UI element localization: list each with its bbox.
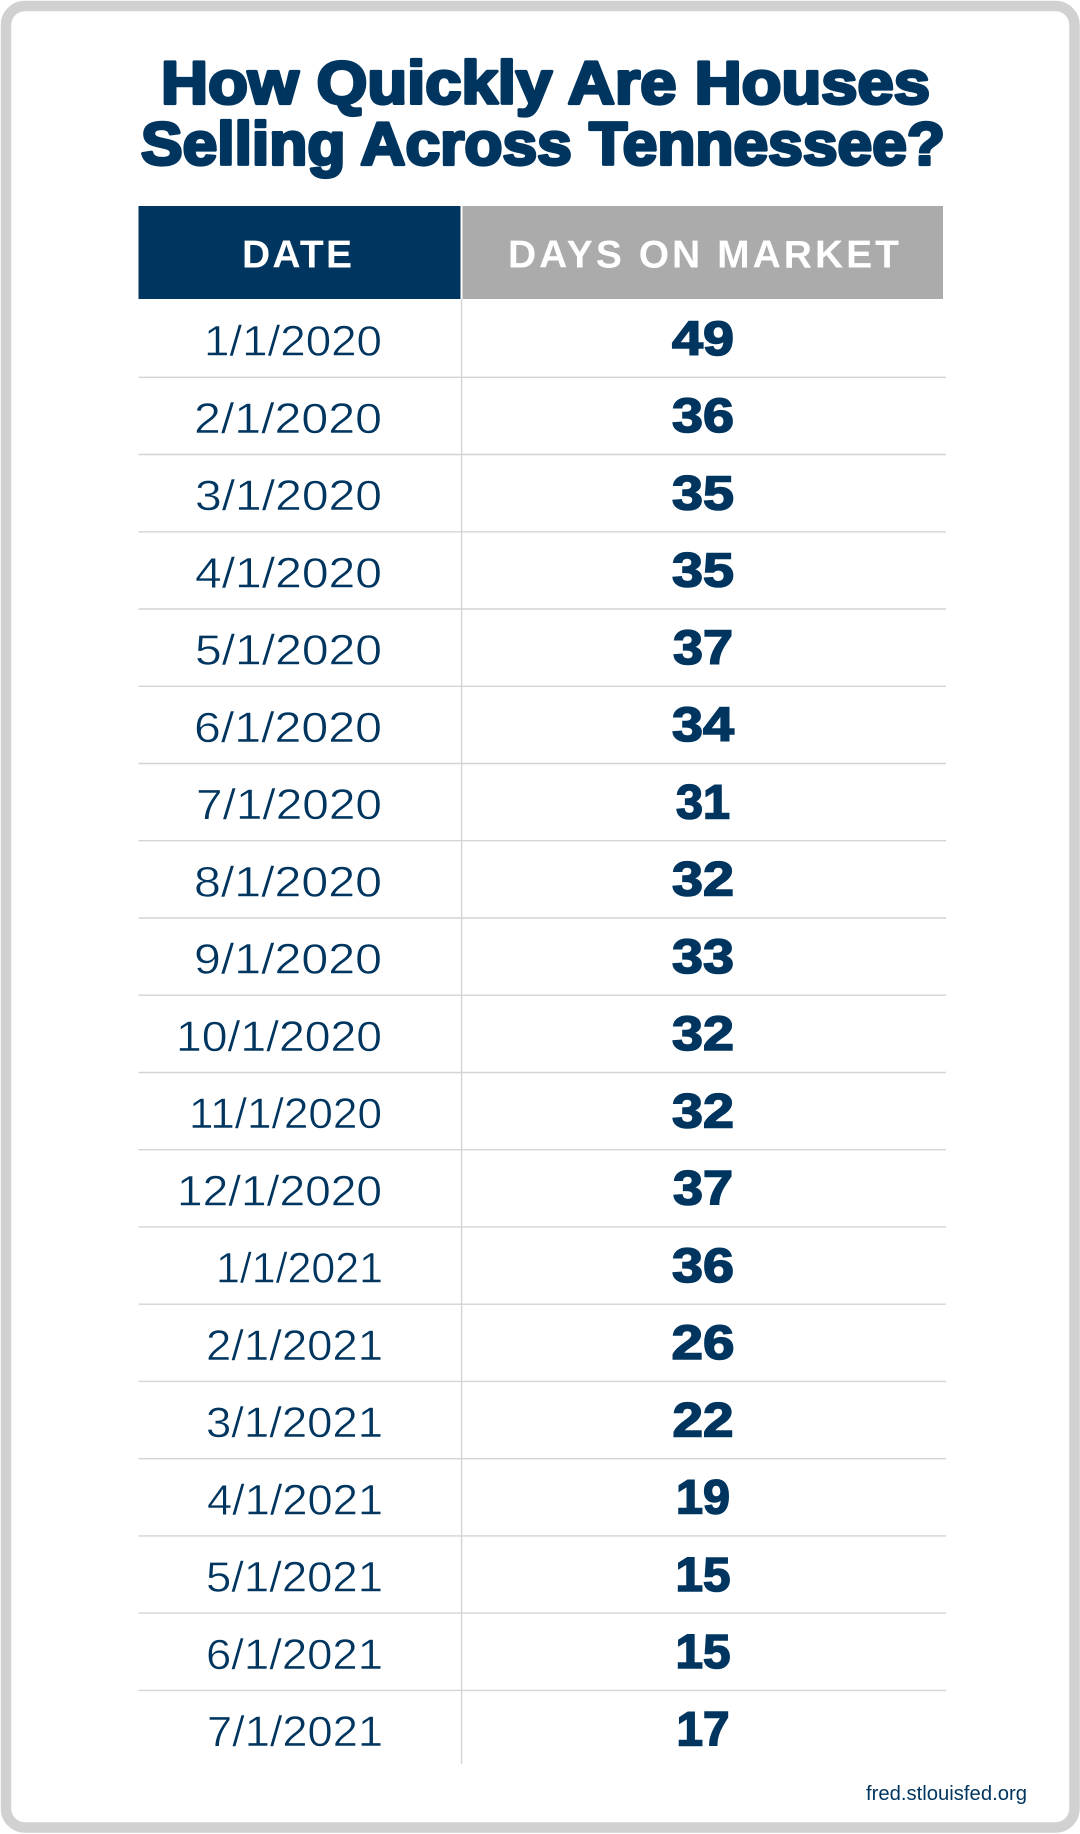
row 5/1/2020: [195, 622, 733, 675]
row 5/1/2020: 5/1/2020: [195, 627, 382, 675]
row 7/1/2020: 7/1/2020: [196, 781, 382, 829]
row 7/1/2021: 7/1/2021: [207, 1708, 383, 1756]
row 9/1/2020: 9/1/2020: [194, 936, 382, 984]
row 11/1/2020: 32: [672, 1085, 734, 1138]
row 12/1/2020: [177, 1163, 733, 1216]
row 12/1/2020: 37: [673, 1163, 733, 1216]
row 2/1/2020: 2/1/2020: [194, 395, 382, 443]
row 7/1/2021: [207, 1703, 730, 1756]
row 10/1/2020: 10/1/2020: [176, 1013, 382, 1061]
row 2/1/2021: 26: [672, 1317, 734, 1370]
row 9/1/2020: 33: [672, 931, 734, 984]
row 6/1/2021: 15: [676, 1626, 730, 1679]
row 4/1/2021: 19: [676, 1472, 730, 1525]
row 8/1/2020: 8/1/2020: [194, 858, 382, 906]
table header: days on market: [462, 206, 943, 299]
row 1/1/2020: 1/1/2020: [204, 318, 382, 366]
title: How Quickly Are Houses: [161, 49, 930, 116]
title: Selling Across Tennessee?: [141, 110, 945, 177]
table header: days on market: DAYS ON MARKET: [508, 234, 899, 276]
row 1/1/2021: 36: [672, 1240, 734, 1293]
row 6/1/2020: 6/1/2020: [194, 704, 382, 752]
row 10/1/2020: 32: [672, 1008, 734, 1061]
row 6/1/2020: 34: [672, 699, 734, 752]
row 4/1/2020: [195, 545, 734, 598]
row 4/1/2021: 4/1/2021: [207, 1476, 383, 1524]
row 11/1/2020: 11/1/2020: [189, 1090, 382, 1138]
table header: date: [138, 206, 460, 299]
source url: fred.stlouisfed.org: [866, 1783, 1027, 1805]
row 2/1/2021: [206, 1317, 734, 1370]
row 11/1/2020: [189, 1085, 734, 1138]
row 1/1/2021: 1/1/2021: [216, 1245, 383, 1293]
row 5/1/2021: 15: [676, 1549, 730, 1602]
title: [141, 49, 945, 177]
row 3/1/2020: 35: [672, 467, 734, 520]
row 6/1/2021: [206, 1626, 730, 1679]
row 2/1/2020: [194, 390, 734, 443]
row 3/1/2021: 3/1/2021: [206, 1399, 383, 1447]
row 10/1/2020: [176, 1008, 734, 1061]
row 5/1/2021: 5/1/2021: [206, 1554, 383, 1602]
row 4/1/2021: [207, 1472, 730, 1525]
table header: date: DATE: [242, 234, 352, 276]
row 12/1/2020: 12/1/2020: [177, 1168, 382, 1216]
row 7/1/2021: 17: [676, 1703, 730, 1756]
row 4/1/2020: 35: [672, 545, 734, 598]
row 3/1/2020: 3/1/2020: [195, 472, 382, 520]
row 8/1/2020: [194, 854, 734, 907]
row 5/1/2021: [206, 1549, 730, 1602]
row 3/1/2021: 22: [672, 1394, 734, 1447]
row 2/1/2021: 2/1/2021: [206, 1322, 383, 1370]
row 1/1/2020: 49: [672, 313, 734, 366]
table rules: [138, 299, 946, 1764]
row 6/1/2021: 6/1/2021: [206, 1631, 383, 1679]
row 8/1/2020: 32: [672, 854, 734, 907]
row 7/1/2020: [196, 776, 730, 829]
table: [138, 206, 946, 1764]
row 1/1/2021: [216, 1240, 734, 1293]
row 7/1/2020: 31: [676, 776, 730, 829]
row 5/1/2020: 37: [673, 622, 733, 675]
row 1/1/2020: [204, 313, 734, 366]
row 4/1/2020: 4/1/2020: [195, 550, 382, 598]
row 3/1/2021: [206, 1394, 734, 1447]
row 3/1/2020: [195, 467, 734, 520]
row 6/1/2020: [194, 699, 734, 752]
row 9/1/2020: [194, 931, 734, 984]
row 2/1/2020: 36: [672, 390, 734, 443]
